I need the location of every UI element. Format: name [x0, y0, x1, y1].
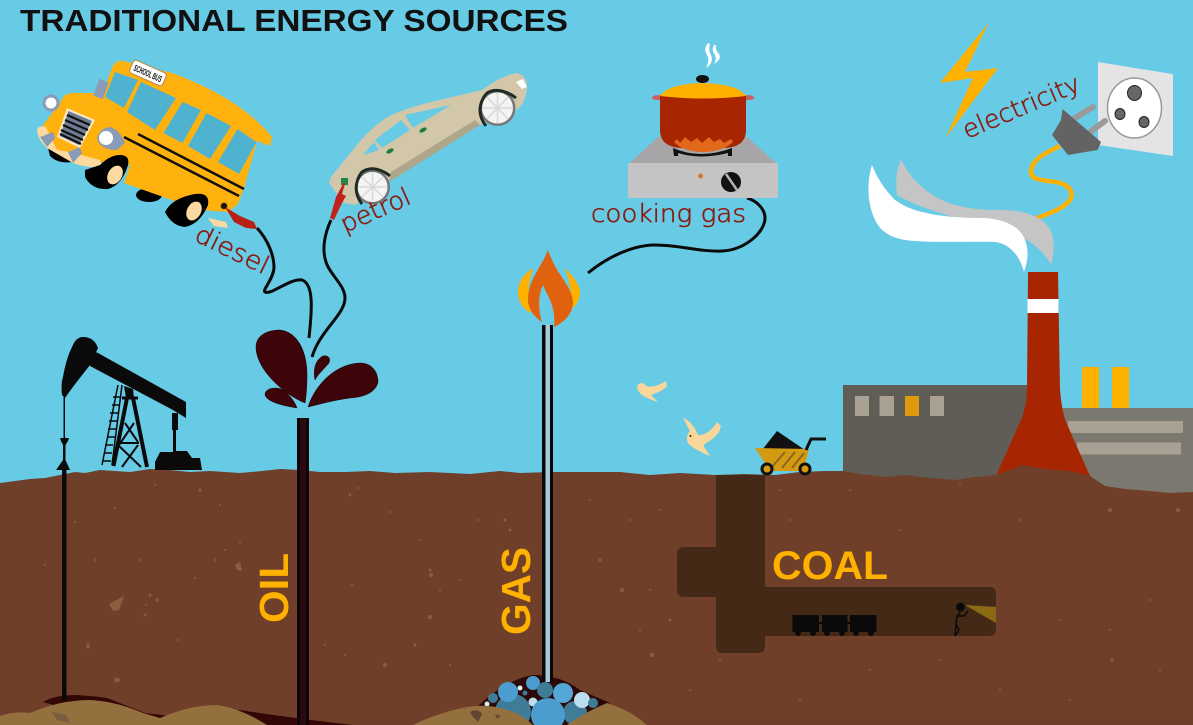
deposits bottom — [0, 675, 647, 725]
label: COAL: COAL — [772, 544, 888, 588]
label: electricity: electricity — [958, 69, 1084, 145]
chimney — [996, 272, 1090, 476]
stove top — [630, 137, 776, 163]
bus headlights — [42, 94, 60, 112]
bus wheels — [85, 155, 128, 189]
pump beam — [90, 350, 186, 418]
wheelbarrow — [755, 431, 826, 474]
car body — [329, 73, 527, 205]
car handles — [386, 147, 394, 155]
miner lamp beam — [965, 605, 996, 623]
bird small — [637, 381, 667, 402]
school bus — [37, 59, 272, 229]
label: GAS: GAS — [493, 547, 539, 635]
stove indicator — [698, 174, 703, 178]
socket and plug — [1052, 62, 1173, 156]
counterweight — [155, 413, 202, 470]
wall socket — [1098, 62, 1173, 156]
bus windows — [105, 72, 256, 174]
bus sign: SCHOOL BUS — [132, 63, 164, 84]
ground — [0, 465, 1193, 725]
steam — [705, 43, 720, 68]
barrow body — [755, 448, 809, 471]
label: OIL: OIL — [251, 553, 297, 623]
label: cooking gas: cooking gas — [591, 199, 746, 228]
bird large — [683, 418, 721, 456]
petrol nozzle — [330, 178, 348, 220]
ground speckles — [44, 484, 1180, 701]
stove knob — [721, 172, 741, 192]
mine carts — [792, 615, 876, 636]
factory side building — [1060, 367, 1193, 498]
hose: diesel — [257, 228, 311, 338]
soil mounds — [0, 700, 267, 725]
hose: petrol — [312, 220, 345, 357]
coal mine tunnel — [677, 475, 996, 653]
bus bumper — [37, 126, 102, 167]
coal pile — [762, 431, 805, 450]
oil well pipe — [297, 418, 309, 725]
diesel nozzle — [220, 202, 228, 210]
bus sign — [129, 59, 167, 87]
barrow wheels — [762, 464, 772, 474]
bus grille — [57, 108, 95, 148]
birds — [637, 381, 721, 456]
smoke — [868, 160, 1054, 272]
oil deposit — [43, 695, 353, 725]
pump head — [62, 337, 98, 398]
hidden wheels — [48, 148, 72, 162]
label: petrol: petrol — [336, 182, 415, 238]
label: diesel: diesel — [190, 219, 274, 280]
miner — [955, 602, 968, 636]
plug — [1052, 107, 1105, 155]
car — [329, 73, 527, 220]
pot — [652, 75, 754, 152]
power cord — [1031, 146, 1072, 218]
car underside — [389, 120, 480, 182]
burner — [673, 148, 732, 156]
pump tower — [102, 385, 147, 467]
bus stripes — [124, 134, 244, 196]
hose: cooking gas — [588, 198, 765, 273]
oil splash — [256, 330, 378, 408]
lightning bolt — [940, 23, 998, 138]
gas pipe — [542, 325, 553, 682]
barrow handle — [806, 439, 826, 450]
bus body — [43, 61, 272, 212]
factory — [843, 272, 1193, 498]
stove with pot — [628, 43, 778, 198]
stove front — [628, 163, 778, 198]
car wheels — [355, 90, 516, 204]
gas flame — [518, 250, 580, 327]
gas deposit — [477, 675, 610, 725]
title: TRADITIONAL ENERGY SOURCES — [20, 3, 568, 38]
car windows — [363, 105, 451, 155]
oil pump jack — [56, 337, 202, 701]
pump rod — [56, 397, 70, 470]
gas bubbles — [484, 676, 598, 725]
factory main building — [843, 385, 1033, 485]
